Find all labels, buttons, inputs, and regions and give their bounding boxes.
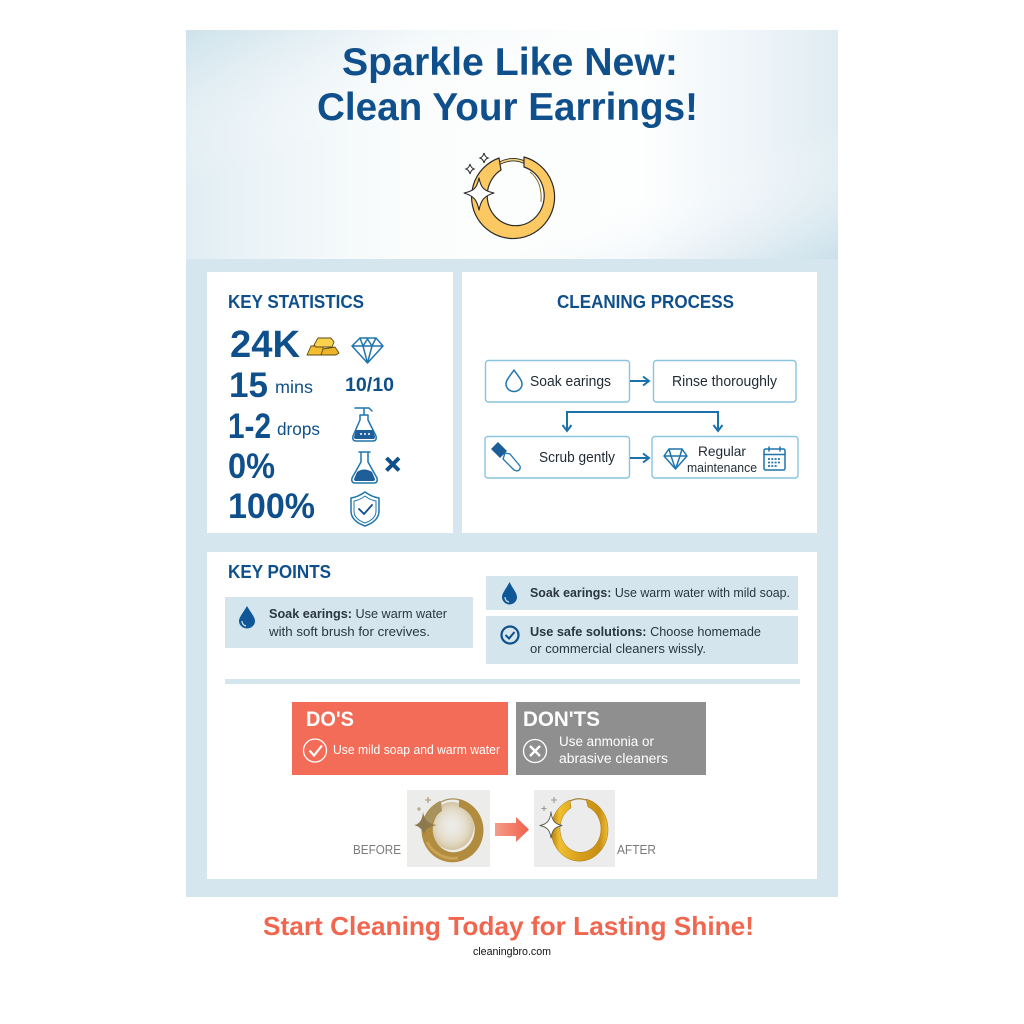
stat: 15 mins: 15 [229, 366, 268, 405]
stat: 15 mins: mins [275, 377, 313, 397]
image: tarnished earring [407, 790, 490, 867]
icon: brush [491, 442, 520, 471]
do's card: DO'S [306, 708, 354, 731]
step: soak earings [486, 360, 630, 402]
poster background panel [186, 30, 838, 897]
don'ts card: Use anmonia or [559, 734, 654, 749]
step: scrub gently: Scrub gently [539, 450, 616, 466]
icon: shield with check [351, 492, 379, 526]
icon: cross mark [386, 458, 399, 470]
image: polished earring [534, 790, 615, 867]
step: rinse thoroughly [654, 360, 796, 402]
key point: soak with soft brush [225, 597, 473, 648]
icon: gold hoop earring with sparkles [464, 153, 555, 239]
title: Clean Your Earrings! [317, 86, 698, 129]
stat: 1-2 drops: drops [277, 419, 320, 439]
do's card: Use mild soap and warm water [333, 742, 501, 757]
arrow: before to after [495, 817, 529, 842]
don'ts card: abrasive cleaners [559, 751, 668, 766]
heading: cleaning process: CLEANING PROCESS [557, 292, 734, 312]
arrow: connector to lower steps [562, 412, 722, 431]
heading: key statistics: KEY STATISTICS [228, 292, 364, 312]
icon: calendar [764, 447, 785, 470]
don'ts card: DON'TS [523, 708, 600, 731]
stat: 10/10: 10/10 [345, 374, 394, 396]
heading: key points: KEY POINTS [228, 562, 331, 582]
panel: key points and comparisons [207, 552, 817, 879]
step: regular maintenance: maintenance [687, 460, 757, 475]
key point: soak with soft brush: Soak earings: Use warm water [269, 606, 448, 621]
key point: use safe solutions [486, 616, 798, 664]
stat: 0%: 0% [228, 447, 275, 486]
arrow: soak to rinse [630, 376, 649, 386]
stat: 1-2 drops: 1-2 [228, 407, 271, 446]
icon: soap pump bottle [353, 408, 376, 441]
panel: key statistics [207, 272, 453, 533]
key point: soak with mild soap: Soak earings: Use warm water with mild soap. [530, 585, 790, 600]
icon: gold bars [307, 338, 339, 355]
label: after: AFTER [617, 843, 656, 857]
title: Sparkle Like New: [342, 41, 678, 84]
title [317, 41, 698, 129]
key point: use safe solutions: Use safe solutions: Choose homemade [530, 624, 761, 639]
arrow: scrub to maintenance [630, 454, 649, 462]
label: before: BEFORE [353, 843, 401, 857]
stat: 15 mins [229, 366, 313, 405]
icon: check circle [304, 739, 326, 762]
stat: 1-2 drops [228, 407, 320, 446]
step: soak earings: Soak earings [530, 374, 611, 390]
source credit: cleaningbro.com [473, 946, 551, 958]
icon: cross circle [524, 740, 546, 762]
key point: soak with soft brush: with soft brush for crevives. [268, 624, 430, 639]
step: scrub gently [485, 436, 630, 478]
call to action: Start Cleaning Today for Lasting Shine! [263, 911, 754, 941]
header banner [186, 30, 838, 259]
don'ts card [516, 702, 706, 775]
panel: cleaning process [462, 272, 817, 533]
stat: 100%: 100% [228, 487, 315, 526]
step: regular maintenance [652, 436, 798, 478]
step: rinse thoroughly: Rinse thoroughly [672, 373, 777, 390]
icon: flask [352, 452, 377, 483]
key point: soak with mild soap [486, 576, 798, 610]
key point: use safe solutions: or commercial cleaners wissly. [530, 641, 706, 656]
do's card [292, 702, 508, 775]
stat: 24K: 24K [230, 324, 301, 366]
icon: diamond [352, 338, 383, 363]
step: regular maintenance: Regular [698, 443, 746, 459]
